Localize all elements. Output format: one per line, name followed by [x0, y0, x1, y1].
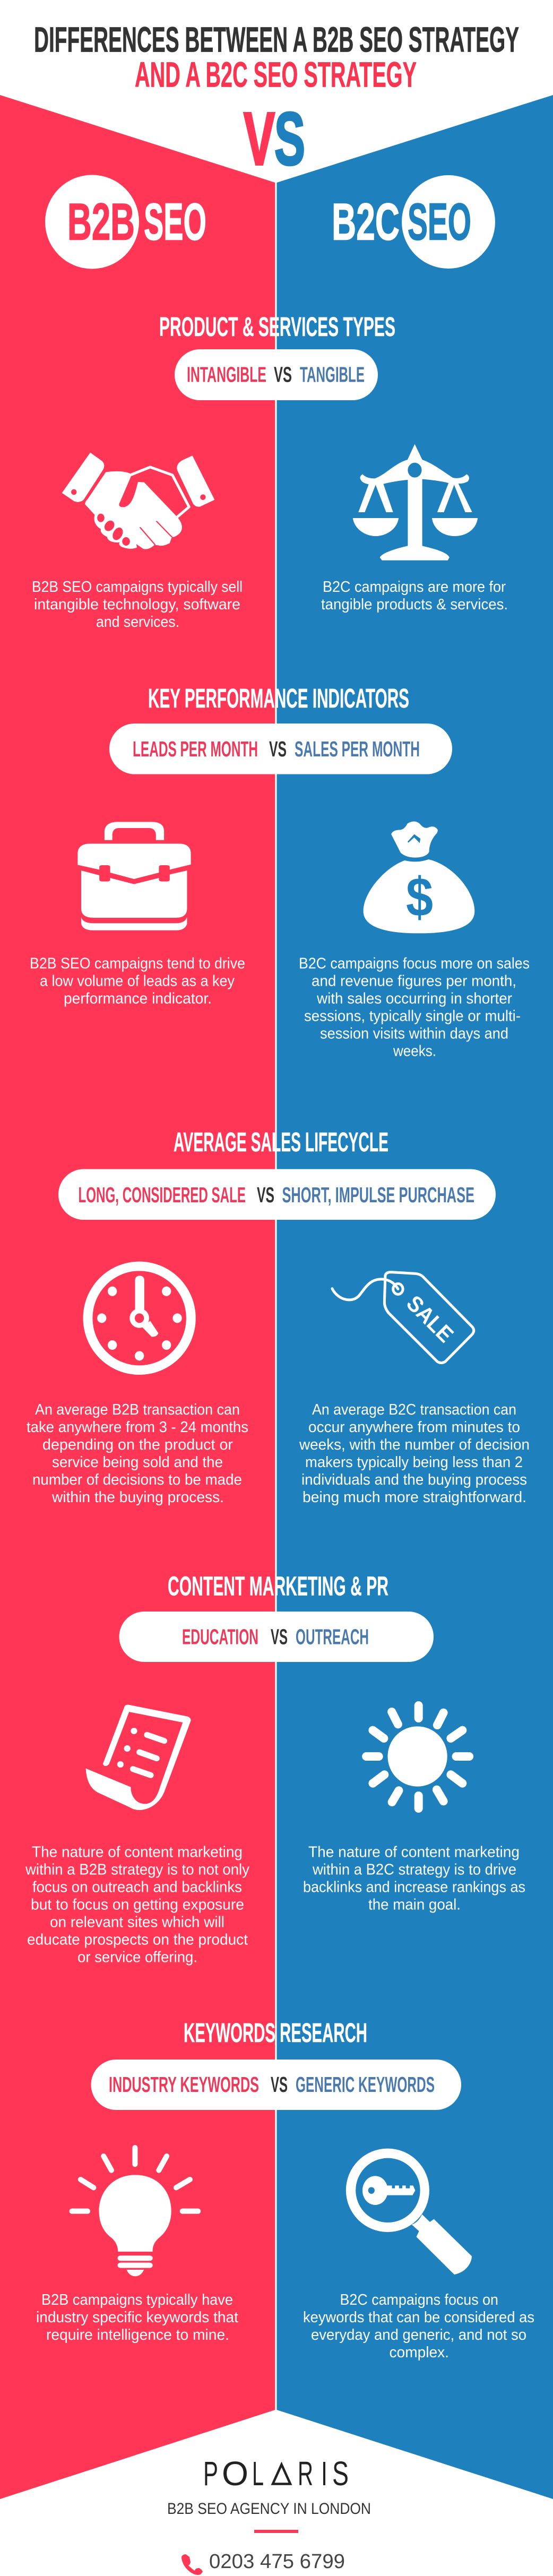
comparison pill: VS: [271, 2072, 288, 2097]
text: B2C KPIs: [299, 955, 530, 1059]
text: B2C content marketing: the main goal.: [368, 1896, 461, 1913]
comparison pill: INDUSTRY KEYWORDS: [109, 2072, 259, 2097]
logo: Polaris: P: [203, 2454, 218, 2493]
text: B2C keywords: complex.: [390, 2344, 449, 2361]
comparison pill: VS: [274, 362, 292, 386]
comparison pill: [91, 2060, 461, 2110]
icon: light bulb: [72, 2148, 198, 2276]
heading: AVERAGE SALES LIFECYCLE: [174, 1127, 388, 1157]
text: B2B content marketing: but to focus on getting exposure: [31, 1896, 244, 1913]
text: B2C lifecycle: makers typically being less than 2: [305, 1454, 523, 1471]
B2B SEO badge: [45, 175, 206, 269]
icon: clock: [83, 1262, 196, 1375]
text: B2C keywords: keywords that can be considered as: [303, 2309, 534, 2326]
icon: money bag: [364, 821, 474, 933]
comparison pill: [109, 723, 452, 774]
icon: sale tag: [332, 1272, 474, 1363]
comparison pill: TANGIBLE: [300, 362, 365, 386]
logo: Polaris: S: [332, 2454, 349, 2493]
text: B2B KPIs: [30, 955, 245, 1007]
text: B2B lifecycle: [27, 1401, 248, 1506]
section: keywords research: [36, 2018, 534, 2361]
text: B2C lifecycle: being much more straightforward.: [303, 1489, 526, 1506]
VS emblem: V: [244, 97, 275, 180]
text: B2B content marketing: The nature of content marketing: [32, 1844, 243, 1861]
text: B2C product types: B2C campaigns are more for: [323, 579, 506, 596]
text: B2C KPIs: sessions, typically single or multi-: [304, 1007, 521, 1024]
text: B2C product types: [321, 579, 508, 613]
section: average sales lifecycle: [27, 1127, 530, 1506]
logo: Polaris: O: [222, 2454, 248, 2493]
section: product and services types: [32, 312, 508, 631]
comparison pill: EDUCATION: [182, 1624, 258, 1649]
logo: Polaris: I: [321, 2454, 327, 2493]
footer: [167, 2454, 371, 2575]
text: B2B content marketing: on relevant sites which will: [50, 1914, 224, 1931]
logo: Polaris: [203, 2454, 349, 2493]
B2B SEO badge: B2B: [67, 192, 135, 251]
text: B2B product types: B2B SEO campaigns typically sell: [32, 579, 243, 596]
comparison pill: [175, 349, 378, 400]
text: B2B product types: and services.: [96, 614, 179, 631]
text: B2C KPIs: weeks.: [393, 1043, 436, 1059]
text: B2C content marketing: within a B2C strategy is to drive: [312, 1861, 516, 1878]
text: B2B content marketing: within a B2B strategy is to not only: [25, 1861, 249, 1878]
comparison pill: GENERIC KEYWORDS: [296, 2072, 435, 2097]
comparison pill: VS: [269, 737, 287, 761]
text: B2C keywords: [303, 2291, 534, 2361]
text: B2C lifecycle: weeks, with the number of decision: [299, 1436, 530, 1453]
text: B2B content marketing: focus on outreach and backlinks: [32, 1879, 242, 1896]
text: B2C lifecycle: An average B2C transaction can: [312, 1401, 516, 1418]
panel: B2C blue column: [277, 95, 553, 2499]
text: B2C content marketing: backlinks and increase rankings as: [303, 1879, 525, 1896]
text: B2B keywords: [36, 2291, 238, 2344]
B2C SEO badge: B2C: [332, 192, 400, 251]
comparison pill: OUTREACH: [296, 1624, 369, 1649]
text: B2C lifecycle: [299, 1401, 530, 1506]
icon: money bag: $: [406, 867, 433, 928]
text: B2B lifecycle: within the buying process.: [51, 1489, 224, 1506]
heading: CONTENT MARKETING & PR: [168, 1571, 388, 1601]
icon: document scroll: [86, 1705, 191, 1810]
text: B2B KPIs: B2B SEO campaigns tend to drive: [30, 955, 245, 972]
icon: sale tag: SALE: [402, 1290, 459, 1347]
section: content marketing and PR: [25, 1571, 525, 1966]
text: B2B content marketing: educate prospects on the product: [27, 1931, 248, 1948]
icon: sun: [366, 1705, 469, 1808]
comparison pill: LONG, CONSIDERED SALE: [79, 1183, 246, 1207]
icon: briefcase: [77, 822, 191, 931]
comparison pill: VS: [271, 1624, 288, 1649]
text: B2B content marketing: [25, 1844, 249, 1966]
text: B2B keywords: industry specific keywords that: [36, 2309, 238, 2326]
text: B2C KPIs: B2C campaigns focus more on sales: [299, 955, 530, 972]
icon: telephone: [182, 2554, 203, 2575]
comparison pill: [119, 1612, 434, 1662]
text: B2B lifecycle: service being sold and the: [52, 1454, 223, 1471]
icon: magnifying glass with key: [346, 2149, 472, 2275]
B2C SEO badge: [332, 175, 495, 269]
text: B2B keywords: require intelligence to mine.: [46, 2327, 229, 2344]
panel: B2B red column: [0, 95, 275, 2499]
text: B2C KPIs: and revenue figures per month,: [312, 972, 516, 989]
icon: balance scales: [353, 444, 478, 561]
comparison pill: LEADS PER MONTH: [133, 737, 258, 761]
B2C SEO badge: SEO: [408, 192, 471, 251]
comparison pill: SALES PER MONTH: [295, 737, 420, 761]
icon: handshake: [62, 453, 214, 549]
VS emblem: S: [274, 97, 305, 180]
text: B2C lifecycle: occur anywhere from minutes to: [308, 1419, 520, 1436]
text: B2C keywords: B2C campaigns focus on: [340, 2291, 498, 2308]
phone number: 0203 475 6799: [209, 2551, 345, 2573]
comparison pill: INTANGIBLE: [187, 362, 266, 386]
logo: Polaris: R: [298, 2454, 313, 2493]
tagline: B2B SEO AGENCY IN LONDON: [167, 2500, 371, 2518]
text: B2B KPIs: performance indicator.: [64, 990, 212, 1007]
text: B2B lifecycle: depending on the product or: [42, 1436, 233, 1453]
section: key performance indicators: [30, 683, 530, 1059]
comparison pill: [58, 1169, 496, 1220]
text: B2B keywords: B2B campaigns typically have: [41, 2291, 233, 2308]
accent rule: [254, 2530, 298, 2533]
title: [34, 20, 519, 94]
text: B2B lifecycle: number of decisions to be made: [32, 1471, 242, 1488]
text: B2B lifecycle: An average B2B transaction can: [35, 1401, 240, 1418]
text: B2B lifecycle: take anywhere from 3 - 24 months: [27, 1419, 248, 1436]
text: B2C content marketing: The nature of content marketing: [308, 1844, 520, 1861]
text: B2C content marketing: [303, 1844, 525, 1913]
text: B2B product types: [32, 579, 243, 631]
text: B2C lifecycle: individuals and the buying process: [301, 1471, 527, 1488]
text: B2C KPIs: with sales occurring in shorter: [316, 990, 512, 1007]
text: B2C KPIs: session visits within days and: [320, 1026, 508, 1043]
heading: PRODUCT & SERVICES TYPES: [159, 312, 395, 342]
text: B2B product types: intangible technology, software: [34, 596, 240, 613]
comparison pill: VS: [257, 1183, 274, 1207]
text: B2C product types: tangible products & services.: [321, 596, 508, 613]
heading: KEYWORDS RESEARCH: [184, 2018, 367, 2048]
text: B2B content marketing: or service offering.: [77, 1949, 197, 1966]
text: B2C keywords: everyday and generic, and not so: [311, 2327, 526, 2344]
logo: Polaris: L: [252, 2454, 264, 2493]
B2B SEO badge: SEO: [144, 192, 206, 251]
text: B2B KPIs: a low volume of leads as a key: [40, 972, 235, 989]
